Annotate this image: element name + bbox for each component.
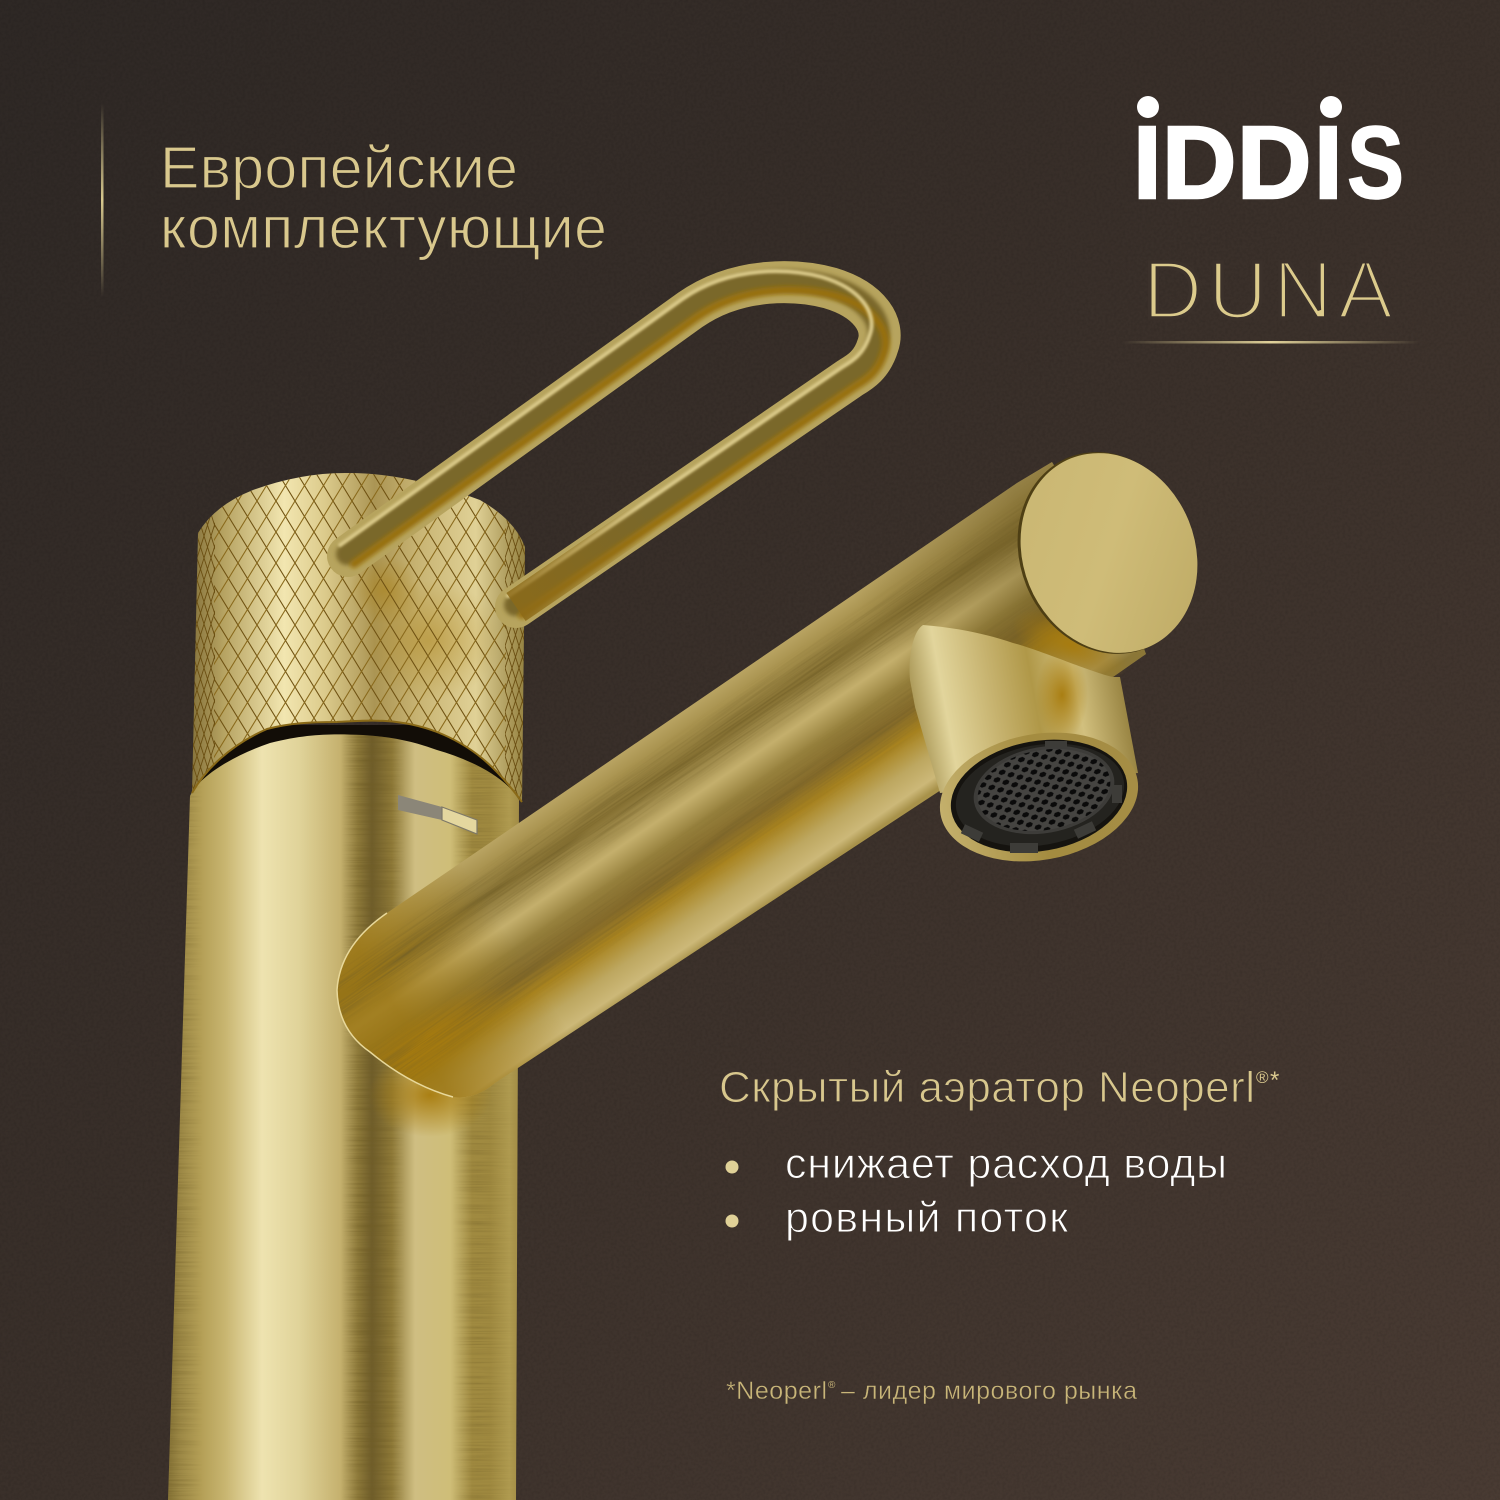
bullet: even flow: ровный поток	[785, 1194, 1069, 1242]
aerator	[930, 718, 1148, 876]
footnote: – лидер мирового рынка	[841, 1377, 1137, 1405]
subheading: Скрытый аэратор Neoperl	[719, 1063, 1255, 1112]
footnote: *Neoperl	[726, 1377, 827, 1405]
logo: IDDIS: IDDI	[1133, 105, 1343, 220]
logo: IDDIS: S	[1347, 106, 1404, 221]
heading: European components: комплектующие	[160, 195, 607, 261]
subheading: ®	[1256, 1068, 1269, 1087]
spout	[336, 462, 1146, 1098]
text block: Neoperl aerator	[719, 1063, 1279, 1242]
spout gold reflection	[1002, 593, 1138, 697]
faucet	[168, 261, 1198, 1500]
knurled cap	[188, 465, 529, 810]
bullet: reduces water use: снижает расход воды	[785, 1140, 1227, 1188]
aerator neck	[910, 625, 1138, 793]
subheading: *	[1270, 1067, 1279, 1094]
footnote: ®	[828, 1380, 836, 1391]
faucet body	[160, 720, 530, 1500]
spout end disk	[988, 425, 1227, 681]
dark gap under knurled cap	[194, 725, 518, 802]
handle lever	[340, 271, 886, 615]
heading: European components: Европейские	[160, 135, 518, 201]
series name: DUNA: DUNA	[1143, 245, 1393, 336]
heading: European components	[101, 103, 607, 297]
body indicator mark	[398, 795, 477, 834]
